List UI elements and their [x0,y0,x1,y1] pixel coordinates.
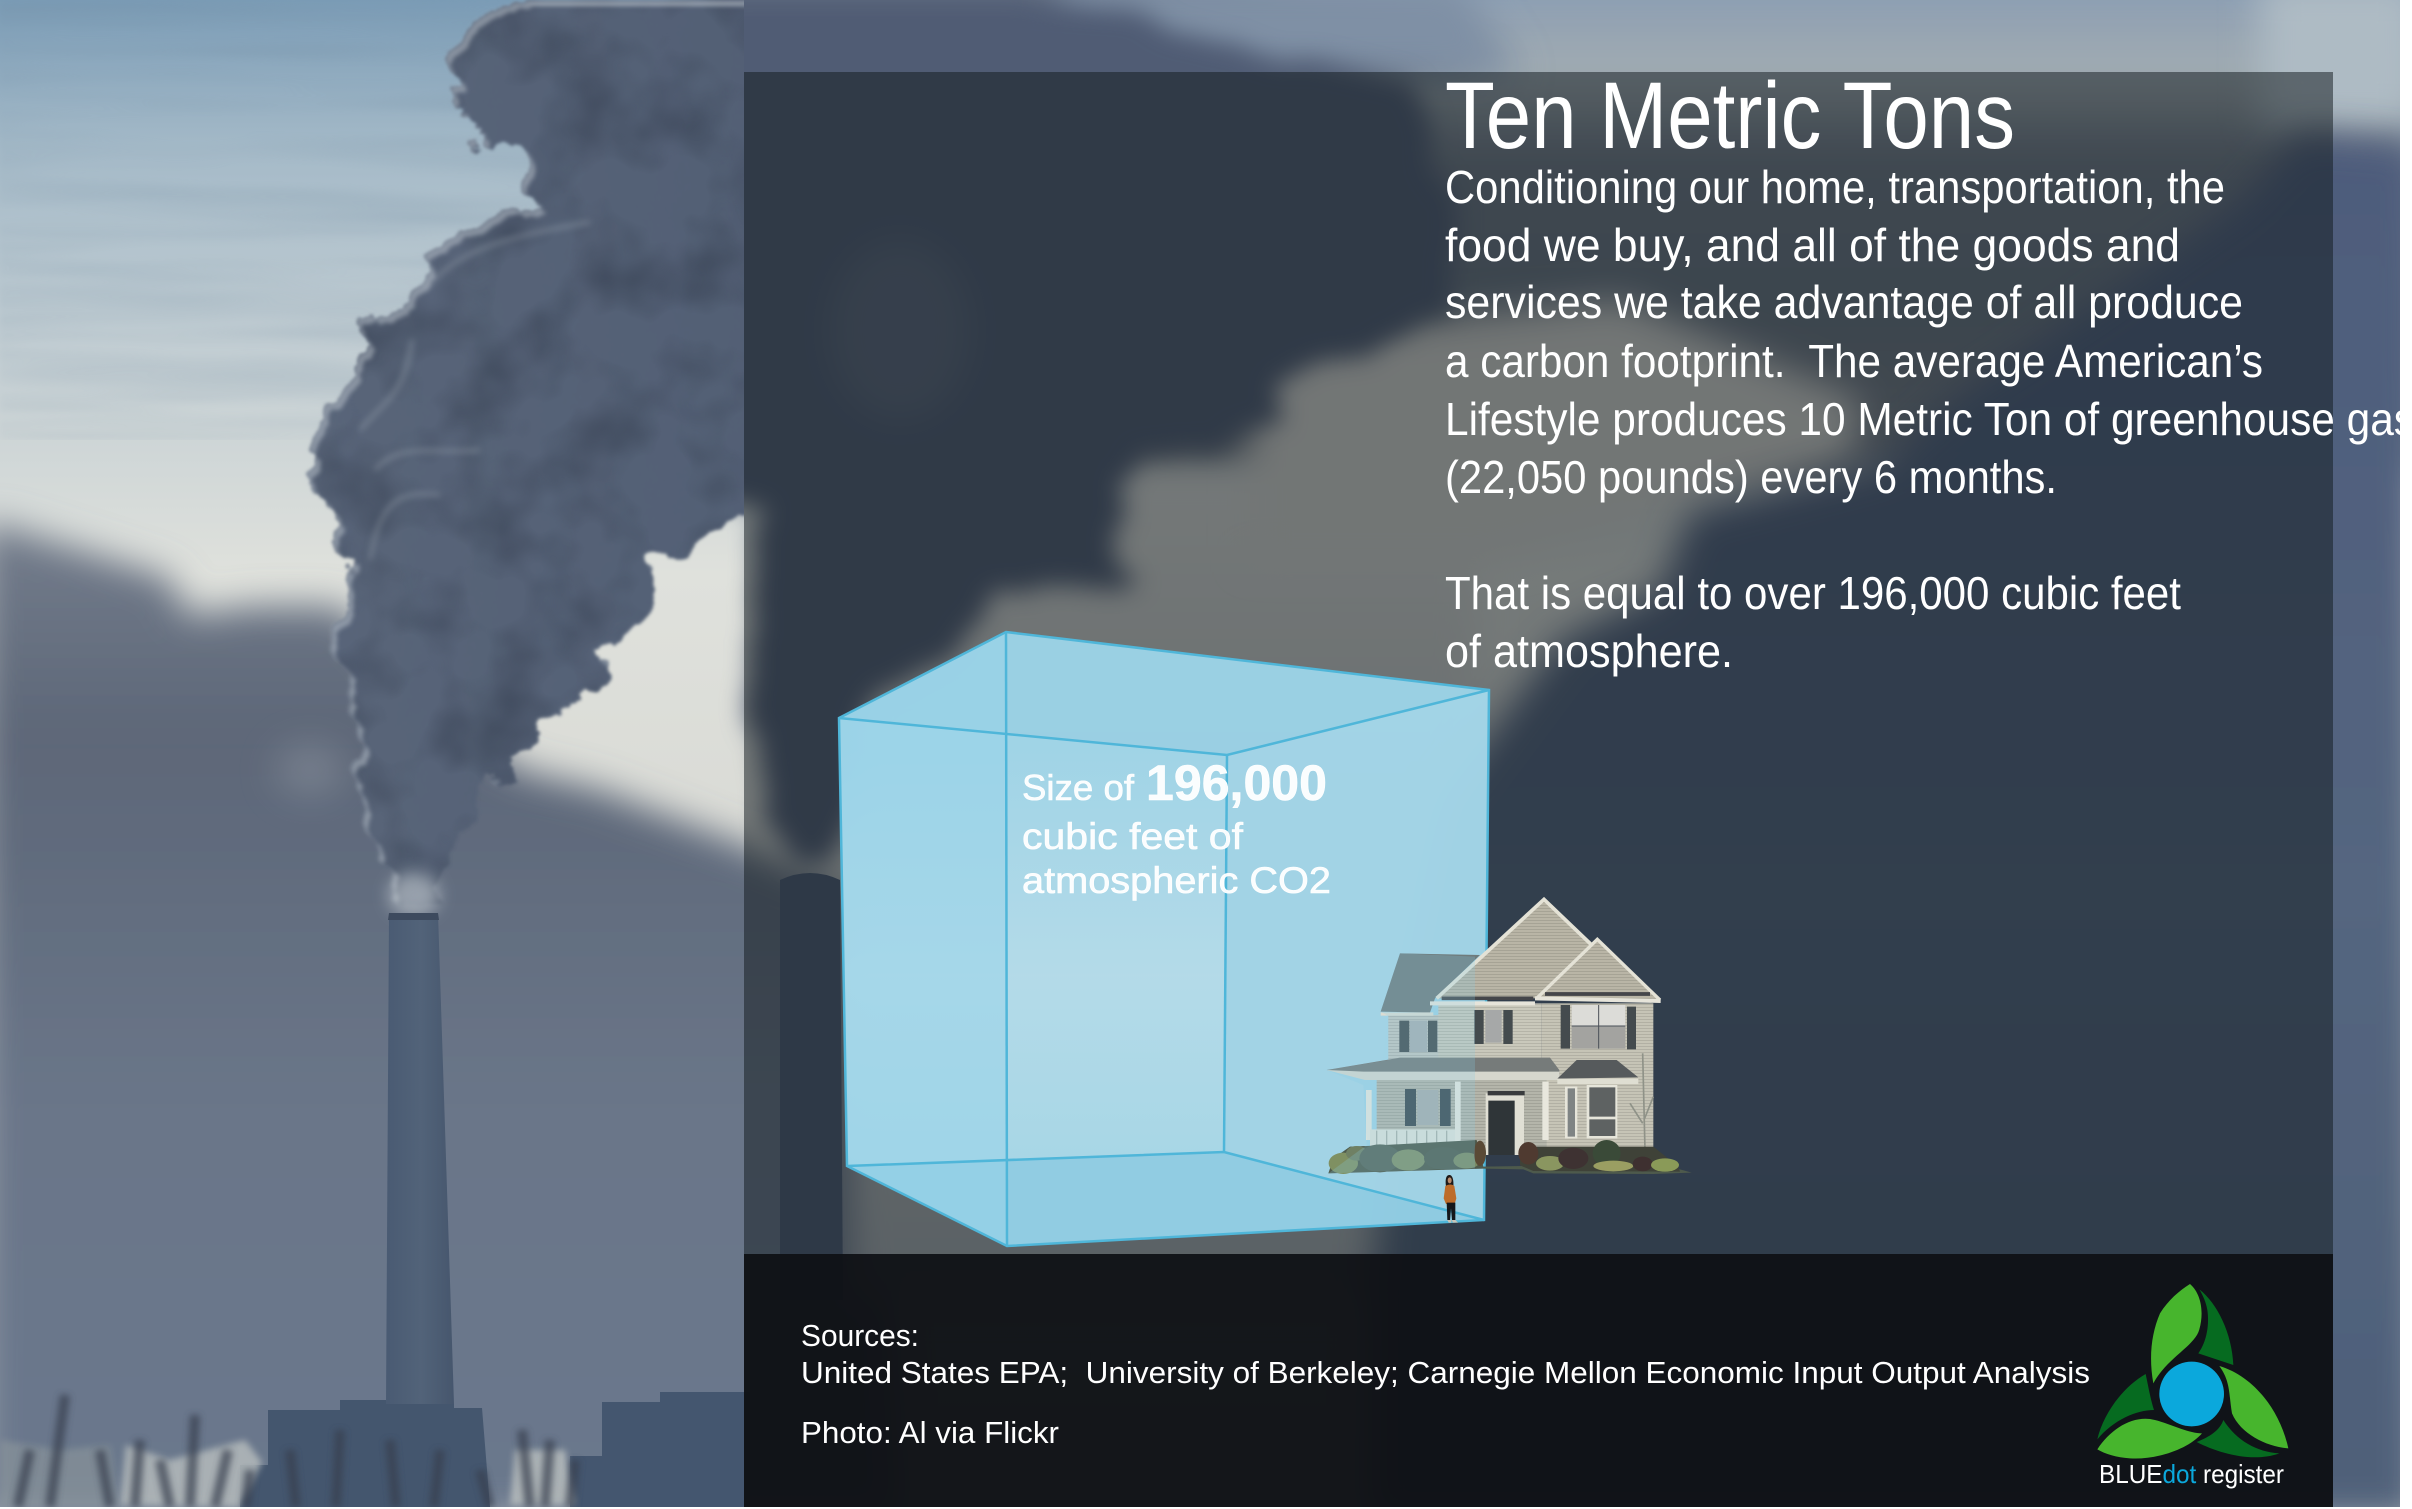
cube label: Size of [1022,767,1135,808]
logo: BLUEdot register [2097,1284,2288,1489]
body text: carbon footprint explanation: services we take advantage of all produce [1445,276,2243,328]
cube edges [839,632,1489,1246]
house: porch and door [1327,1058,1559,1155]
sources text: United States EPA; University of Berkeley; Carnegie Mellon Economic Input Output Analysis [801,1355,2090,1390]
title: Ten Metric Tons [1445,63,2015,169]
house: roofs and gables [1381,899,1661,1060]
house [1320,899,1692,1180]
house: cube tint over left side [1328,954,1475,1174]
body text: carbon footprint explanation: food we buy, and all of the goods and [1445,219,2180,271]
3D cube of 196,000 cubic feet [839,632,1489,1246]
cube label: 196,000 [1146,755,1327,811]
panel: sources footer band [744,1254,2333,1507]
house: walls and upper windows [1399,1003,1653,1153]
cube label: cubic feet of [1022,816,1244,857]
body text: carbon footprint explanation: That is equal to over 196,000 cubic feet [1445,567,2181,619]
sources text: Sources: [801,1318,919,1353]
body text: carbon footprint explanation: a carbon footprint. The average American’s [1445,335,2263,387]
cube faces [839,632,1489,1246]
sources text [801,1318,2090,1450]
person for scale [1444,1175,1458,1223]
body text: carbon footprint explanation: Conditioning our home, transportation, the [1445,161,2225,213]
house: garden [1328,1140,1692,1174]
house: bay window [1557,1053,1653,1150]
logo wordmark: BLUEdot register [2099,1459,2284,1489]
logo mark: three leaves and blue dot [2097,1284,2288,1459]
body text: carbon footprint explanation: of atmosphere. [1445,625,1733,677]
body text: carbon footprint explanation: (22,050 pounds) every 6 months. [1445,451,2057,503]
panel: dark translucent overlay [744,72,2333,1254]
sources text: Photo: Al via Flickr [801,1415,1059,1450]
cube label: atmospheric CO2 [1022,860,1331,901]
body text: carbon footprint explanation [1445,161,2412,677]
cube label [1022,755,1331,901]
